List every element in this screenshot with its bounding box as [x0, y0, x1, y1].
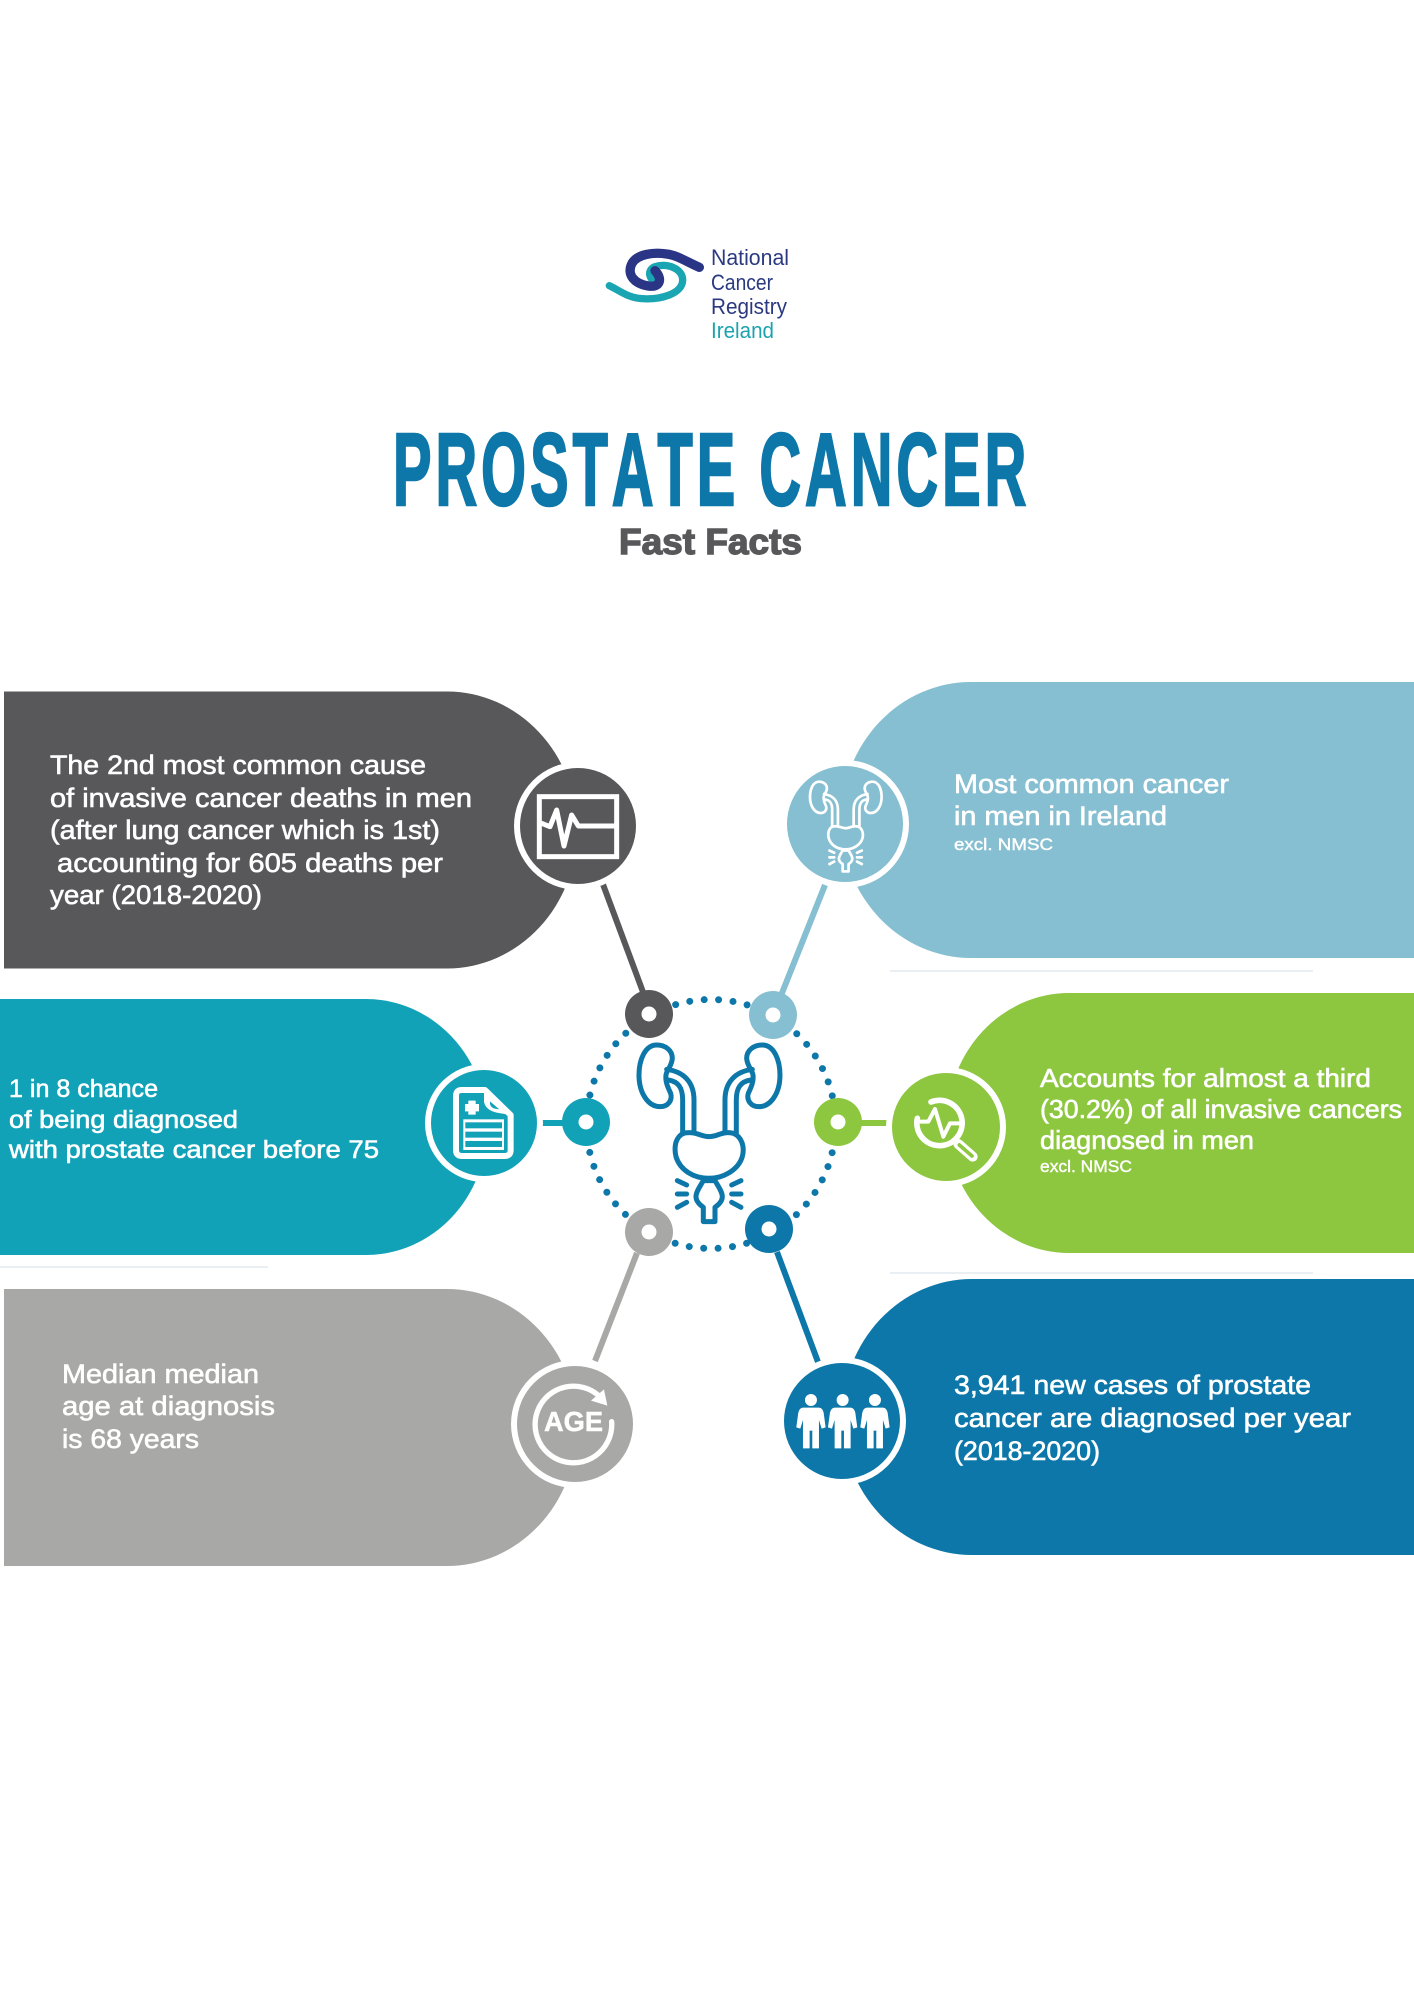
icon: magnifier with pulse: [886, 1067, 1006, 1187]
logo: National Cancer Registry Ireland: [609, 245, 789, 343]
panel: 1 in 8: [0, 999, 487, 1255]
text: median age: [62, 1359, 275, 1454]
text: 1 in 8: 1 in 8 chance: [9, 1075, 158, 1103]
text: third of cancers: [1040, 1063, 1402, 1176]
text: third of cancers: (30.2%) of all invasive cancers: [1040, 1094, 1402, 1124]
connector lines: [541, 879, 889, 1362]
icon: urinary system small: [781, 760, 909, 888]
logo: National Cancer Registry Ireland: Cancer: [711, 270, 773, 295]
text: median age: age at diagnosis: [62, 1391, 275, 1421]
dotted hexagon ring: [586, 1000, 836, 1248]
icon: three people: [778, 1357, 906, 1485]
text: deaths: (after lung cancer which is 1st): [50, 815, 440, 845]
icon: age cycle: AGE: [544, 1406, 603, 1437]
node: green: [814, 1098, 862, 1146]
text: new cases: (2018-2020): [954, 1436, 1100, 1466]
icon: heart monitor: [514, 762, 642, 890]
text: 1 in 8: of being diagnosed: [9, 1106, 238, 1134]
logo: National Cancer Registry Ireland: Ireland: [711, 318, 774, 343]
node: teal: [562, 1098, 610, 1146]
logo: National Cancer Registry Ireland: Registry: [711, 294, 787, 319]
text: new cases: [954, 1370, 1351, 1466]
text: median age: is 68 years: [62, 1424, 199, 1454]
text: deaths: [50, 750, 472, 910]
node: light blue: [749, 991, 797, 1039]
divider lines: [0, 971, 1313, 1273]
title: PROSTATE CANCER: [393, 411, 1030, 527]
text: 1 in 8: with prostate cancer before 75: [8, 1136, 379, 1164]
text: deaths: year (2018-2020): [50, 880, 262, 910]
panel: median age: [4, 1289, 577, 1566]
panel: deaths: [4, 692, 577, 968]
text: deaths: of invasive cancer deaths in men: [50, 783, 472, 813]
text: deaths: The 2nd most common cause: [50, 750, 426, 780]
text: new cases: 3,941 new cases of prostate: [954, 1370, 1311, 1400]
text: most common: [954, 769, 1229, 854]
logo: National Cancer Registry Ireland: National: [711, 245, 789, 270]
text: most common: excl. NMSC: [954, 835, 1053, 854]
text: median age: Median median: [62, 1359, 259, 1389]
panel: third of cancers: [947, 993, 1414, 1253]
text: third of cancers: diagnosed in men: [1040, 1125, 1254, 1155]
text: third of cancers: excl. NMSC: [1040, 1157, 1132, 1176]
node: grey: [625, 1208, 673, 1256]
subtitle: Fast Facts: [619, 521, 802, 562]
panel: most common: [841, 682, 1414, 958]
text: third of cancers: Accounts for almost a third: [1040, 1063, 1371, 1093]
node: dark: [625, 990, 673, 1038]
text: most common: Most common cancer: [954, 769, 1229, 799]
text: most common: in men in Ireland: [954, 801, 1167, 831]
text: deaths: accounting for 605 deaths per: [57, 848, 443, 878]
node: blue: [745, 1205, 793, 1253]
text: new cases: cancer are diagnosed per year: [954, 1403, 1351, 1433]
icon: central urinary system: [639, 1045, 780, 1222]
panel: new cases: [842, 1279, 1414, 1555]
text: 1 in 8: [8, 1075, 379, 1164]
icon: age cycle: [511, 1360, 639, 1488]
icon: medical document: [425, 1064, 543, 1182]
